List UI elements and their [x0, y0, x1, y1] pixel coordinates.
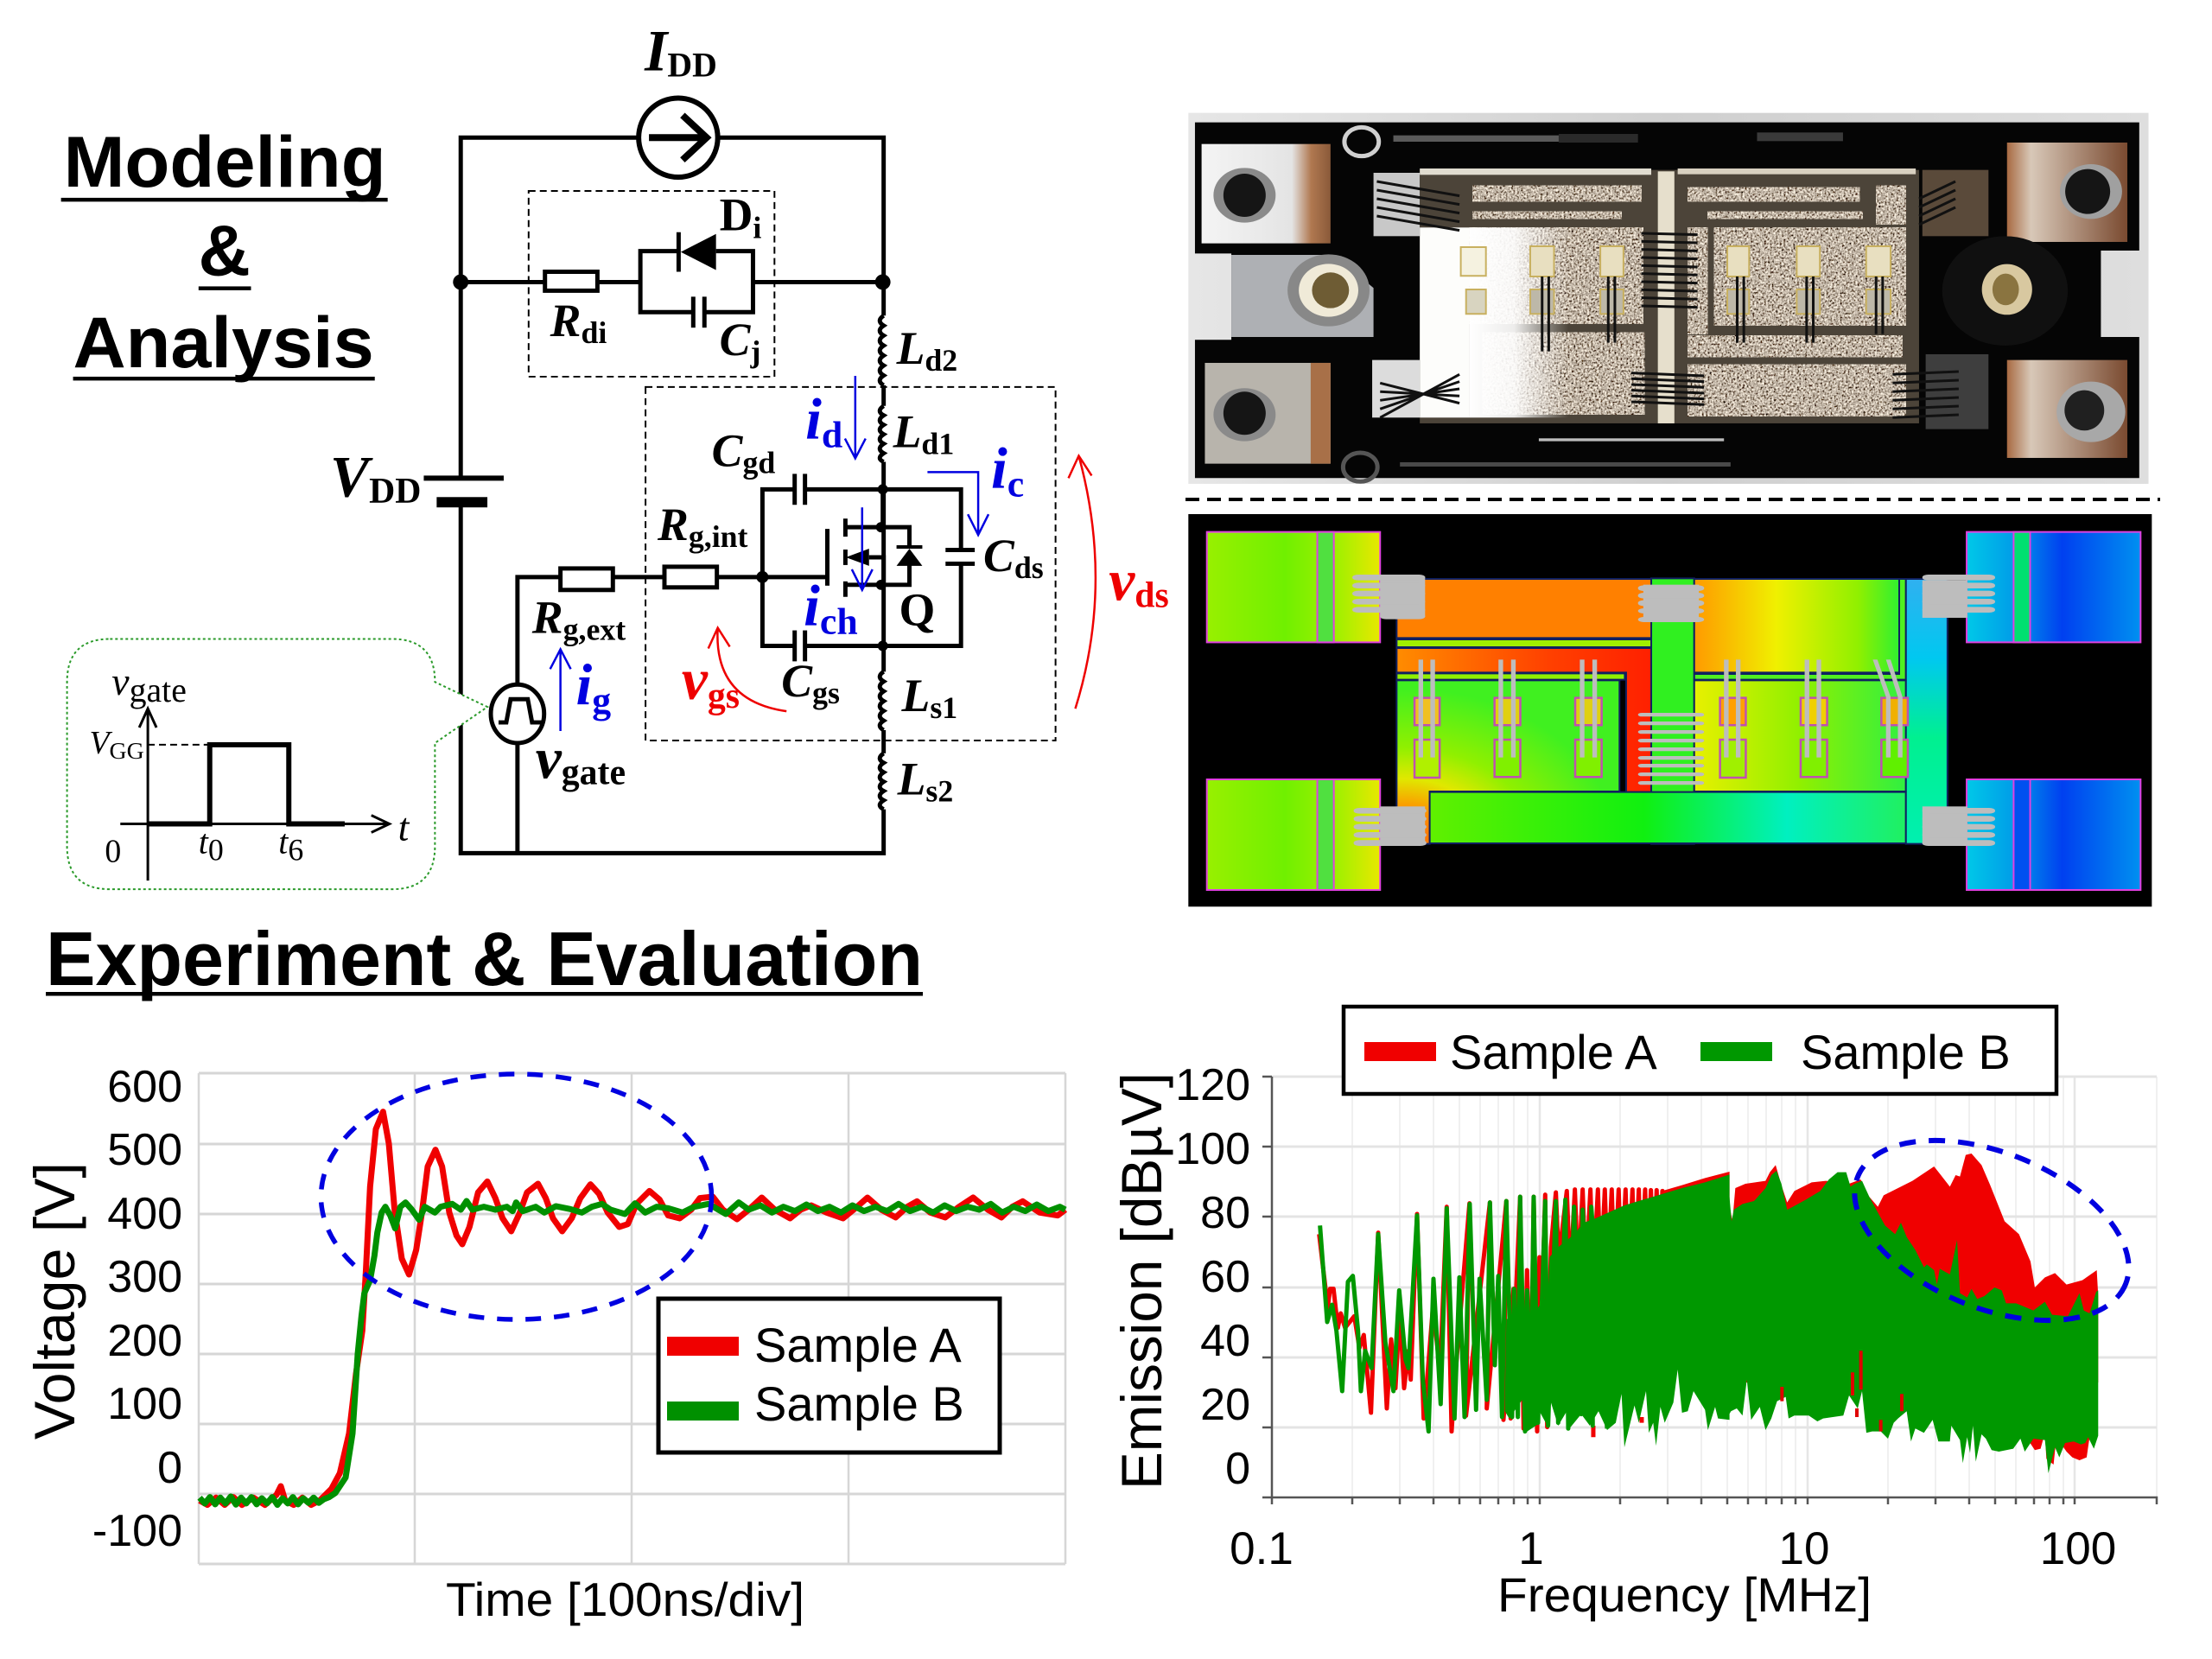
- resistor R_di: [545, 272, 597, 290]
- semiconductor chips: [1461, 246, 1891, 314]
- pulse plot labels: t: [199, 823, 208, 861]
- y-axis tick labels: [1175, 1060, 1250, 1494]
- pulse plot labels: [89, 659, 410, 869]
- legend: [658, 1299, 1000, 1452]
- component labels: i: [804, 574, 820, 639]
- battery V_DD: [423, 475, 504, 507]
- component labels: [330, 19, 1169, 809]
- y-axis tick labels: 120: [1175, 1060, 1250, 1110]
- current source I_DD: [639, 98, 718, 177]
- component labels: ds: [1135, 576, 1169, 616]
- heading: Modeling & Analysis: &: [198, 209, 251, 291]
- map background: [1188, 514, 2152, 906]
- photo: power module: [1188, 113, 2149, 484]
- x-axis title: Time [100ns/div]: [446, 1573, 804, 1626]
- y-axis title: Emission [dBµV]: [1109, 1072, 1173, 1490]
- chart: voltage waveform: [22, 1062, 1065, 1626]
- component labels: L: [898, 753, 925, 805]
- pulse plot labels: v: [111, 659, 130, 703]
- y-axis tick labels: 20: [1200, 1380, 1250, 1430]
- component labels: gs: [812, 676, 840, 710]
- component labels: j: [749, 334, 760, 369]
- axes: [1262, 1077, 2157, 1504]
- component labels: v: [682, 647, 708, 712]
- terminal blocks: [1207, 532, 2140, 890]
- inductors: [880, 315, 884, 810]
- component labels: DD: [369, 472, 421, 512]
- legend: [1344, 1007, 2056, 1094]
- chart: emission spectrum: [1109, 1007, 2157, 1622]
- main wiring: [461, 137, 884, 853]
- y-axis tick labels: 0: [157, 1443, 182, 1493]
- component labels: C: [983, 530, 1014, 582]
- dashed divider: [1185, 498, 2160, 501]
- legend: Sample B: [1801, 1025, 2011, 1079]
- dashed box: device model: [645, 387, 1056, 741]
- legend: Sample B: [754, 1376, 964, 1431]
- component labels: D: [720, 189, 753, 241]
- component labels: I: [645, 19, 667, 84]
- pulse plot labels: V: [89, 725, 110, 761]
- component labels: C: [712, 424, 743, 476]
- pulse plot labels: GG: [110, 738, 144, 765]
- gate loop wiring: [518, 577, 827, 853]
- y-axis tick labels: 100: [107, 1379, 182, 1429]
- grid: [199, 1073, 1065, 1564]
- component labels: gs: [708, 677, 740, 716]
- substrate copper regions: [1396, 578, 1948, 844]
- mounting bushings: [1231, 127, 2068, 481]
- pulse plot labels: 6: [288, 832, 303, 867]
- chip outlines: [1414, 698, 1908, 778]
- pulse plot labels: gate: [130, 671, 187, 709]
- circuit diagram: [330, 19, 1169, 853]
- heading: Experiment & Evaluation: Experiment & Evaluation: [46, 916, 923, 1001]
- y-axis tick labels: 400: [107, 1189, 182, 1239]
- substrate: [1420, 168, 1919, 423]
- blue current arrows: [550, 376, 988, 731]
- pulse plot labels: t: [278, 823, 288, 861]
- component labels: R: [550, 295, 582, 346]
- component labels: v: [536, 727, 562, 791]
- component labels: c: [1007, 463, 1024, 505]
- y-axis tick labels: 80: [1200, 1188, 1250, 1238]
- component labels: R: [532, 592, 563, 644]
- y-axis tick labels: 40: [1200, 1316, 1250, 1366]
- component labels: V: [330, 444, 369, 509]
- component labels: d: [822, 415, 842, 456]
- traces: sample A and sample B: [200, 1112, 1065, 1505]
- resistors R_g,ext and R_g,int: [561, 567, 717, 590]
- component labels: i: [805, 387, 822, 452]
- heading: Modeling & Analysis: Analysis: [73, 302, 374, 383]
- component labels: i: [753, 211, 761, 245]
- callout: gate voltage pulse: [67, 639, 487, 889]
- case details: [1372, 132, 1988, 467]
- component labels: L: [897, 322, 925, 374]
- component labels: L: [902, 670, 930, 721]
- grey bond wires: [1352, 575, 1995, 846]
- heading: Modeling & Analysis: Modeling: [64, 121, 386, 202]
- y-axis tick labels: 100: [1175, 1124, 1250, 1174]
- bond wires: [1376, 181, 1959, 417]
- component labels: i: [991, 435, 1007, 500]
- x-axis tick labels: 1: [1518, 1523, 1544, 1574]
- component labels: C: [781, 655, 812, 707]
- spectrum traces: sample A (red): [1319, 1154, 2098, 1465]
- component labels: g,int: [689, 519, 748, 554]
- screw terminals: [1202, 143, 2127, 464]
- module case: [1195, 123, 2139, 478]
- pulse plot: [120, 709, 390, 880]
- component labels: di: [582, 315, 607, 350]
- y-axis tick labels: -100: [92, 1506, 182, 1556]
- MOSFET Q: [825, 489, 922, 597]
- component labels: d2: [925, 343, 957, 378]
- component labels: ds: [1014, 550, 1044, 585]
- log grid: [1272, 1077, 2157, 1497]
- y-axis tick labels: 0: [1225, 1444, 1250, 1494]
- x-axis tick labels: [1230, 1523, 2116, 1574]
- diode D_i with parallel C_j: [640, 232, 753, 327]
- photo background: [1188, 113, 2149, 484]
- component labels: DD: [667, 47, 717, 85]
- y-axis tick labels: 60: [1200, 1252, 1250, 1302]
- parasitic capacitors Cgd Cgs Cds: [453, 275, 975, 661]
- heading: Modeling & Analysis: [61, 121, 388, 383]
- component labels: C: [720, 314, 750, 365]
- component labels: i: [576, 652, 592, 717]
- pulse plot labels: 0: [208, 832, 224, 867]
- component labels: v: [1109, 549, 1135, 613]
- component labels: Q: [899, 584, 935, 636]
- component labels: s1: [930, 690, 957, 725]
- component labels: d1: [921, 427, 954, 461]
- component labels: g: [592, 680, 611, 721]
- dashed box: diode model: [529, 191, 774, 377]
- component labels: gd: [743, 445, 775, 480]
- y-axis tick labels: 600: [107, 1062, 182, 1112]
- x-axis tick labels: 0.1: [1230, 1523, 1294, 1574]
- legend: Sample A: [1450, 1025, 1657, 1079]
- pulse plot labels: 0: [105, 833, 121, 869]
- spectrum traces: sample B (green): [1320, 1171, 2098, 1473]
- y-axis tick labels: 300: [107, 1252, 182, 1302]
- dashed highlight ellipse: [1829, 1104, 2154, 1357]
- component labels: L: [893, 406, 921, 458]
- red voltage arrows: [709, 456, 1096, 711]
- y-axis title: Voltage [V]: [22, 1162, 86, 1440]
- component labels: ch: [820, 601, 858, 643]
- callout outline: [67, 639, 487, 889]
- y-axis tick labels: [92, 1062, 182, 1556]
- x-axis title: Frequency [MHz]: [1497, 1567, 1872, 1622]
- x-axis tick labels: 10: [1779, 1523, 1829, 1574]
- component labels: g,ext: [563, 612, 626, 647]
- y-axis tick labels: 200: [107, 1316, 182, 1366]
- component labels: s2: [925, 774, 953, 809]
- simulation: thermal field map: [1188, 514, 2152, 906]
- x-axis tick labels: 100: [2040, 1523, 2116, 1574]
- dashed highlight ellipse: [321, 1074, 712, 1319]
- component labels: gate: [562, 753, 626, 793]
- legend: Sample A: [754, 1318, 962, 1372]
- pulse plot labels: t: [398, 804, 410, 849]
- component labels: R: [658, 499, 689, 550]
- y-axis tick labels: 500: [107, 1125, 182, 1175]
- pulse source v_gate: [491, 684, 544, 743]
